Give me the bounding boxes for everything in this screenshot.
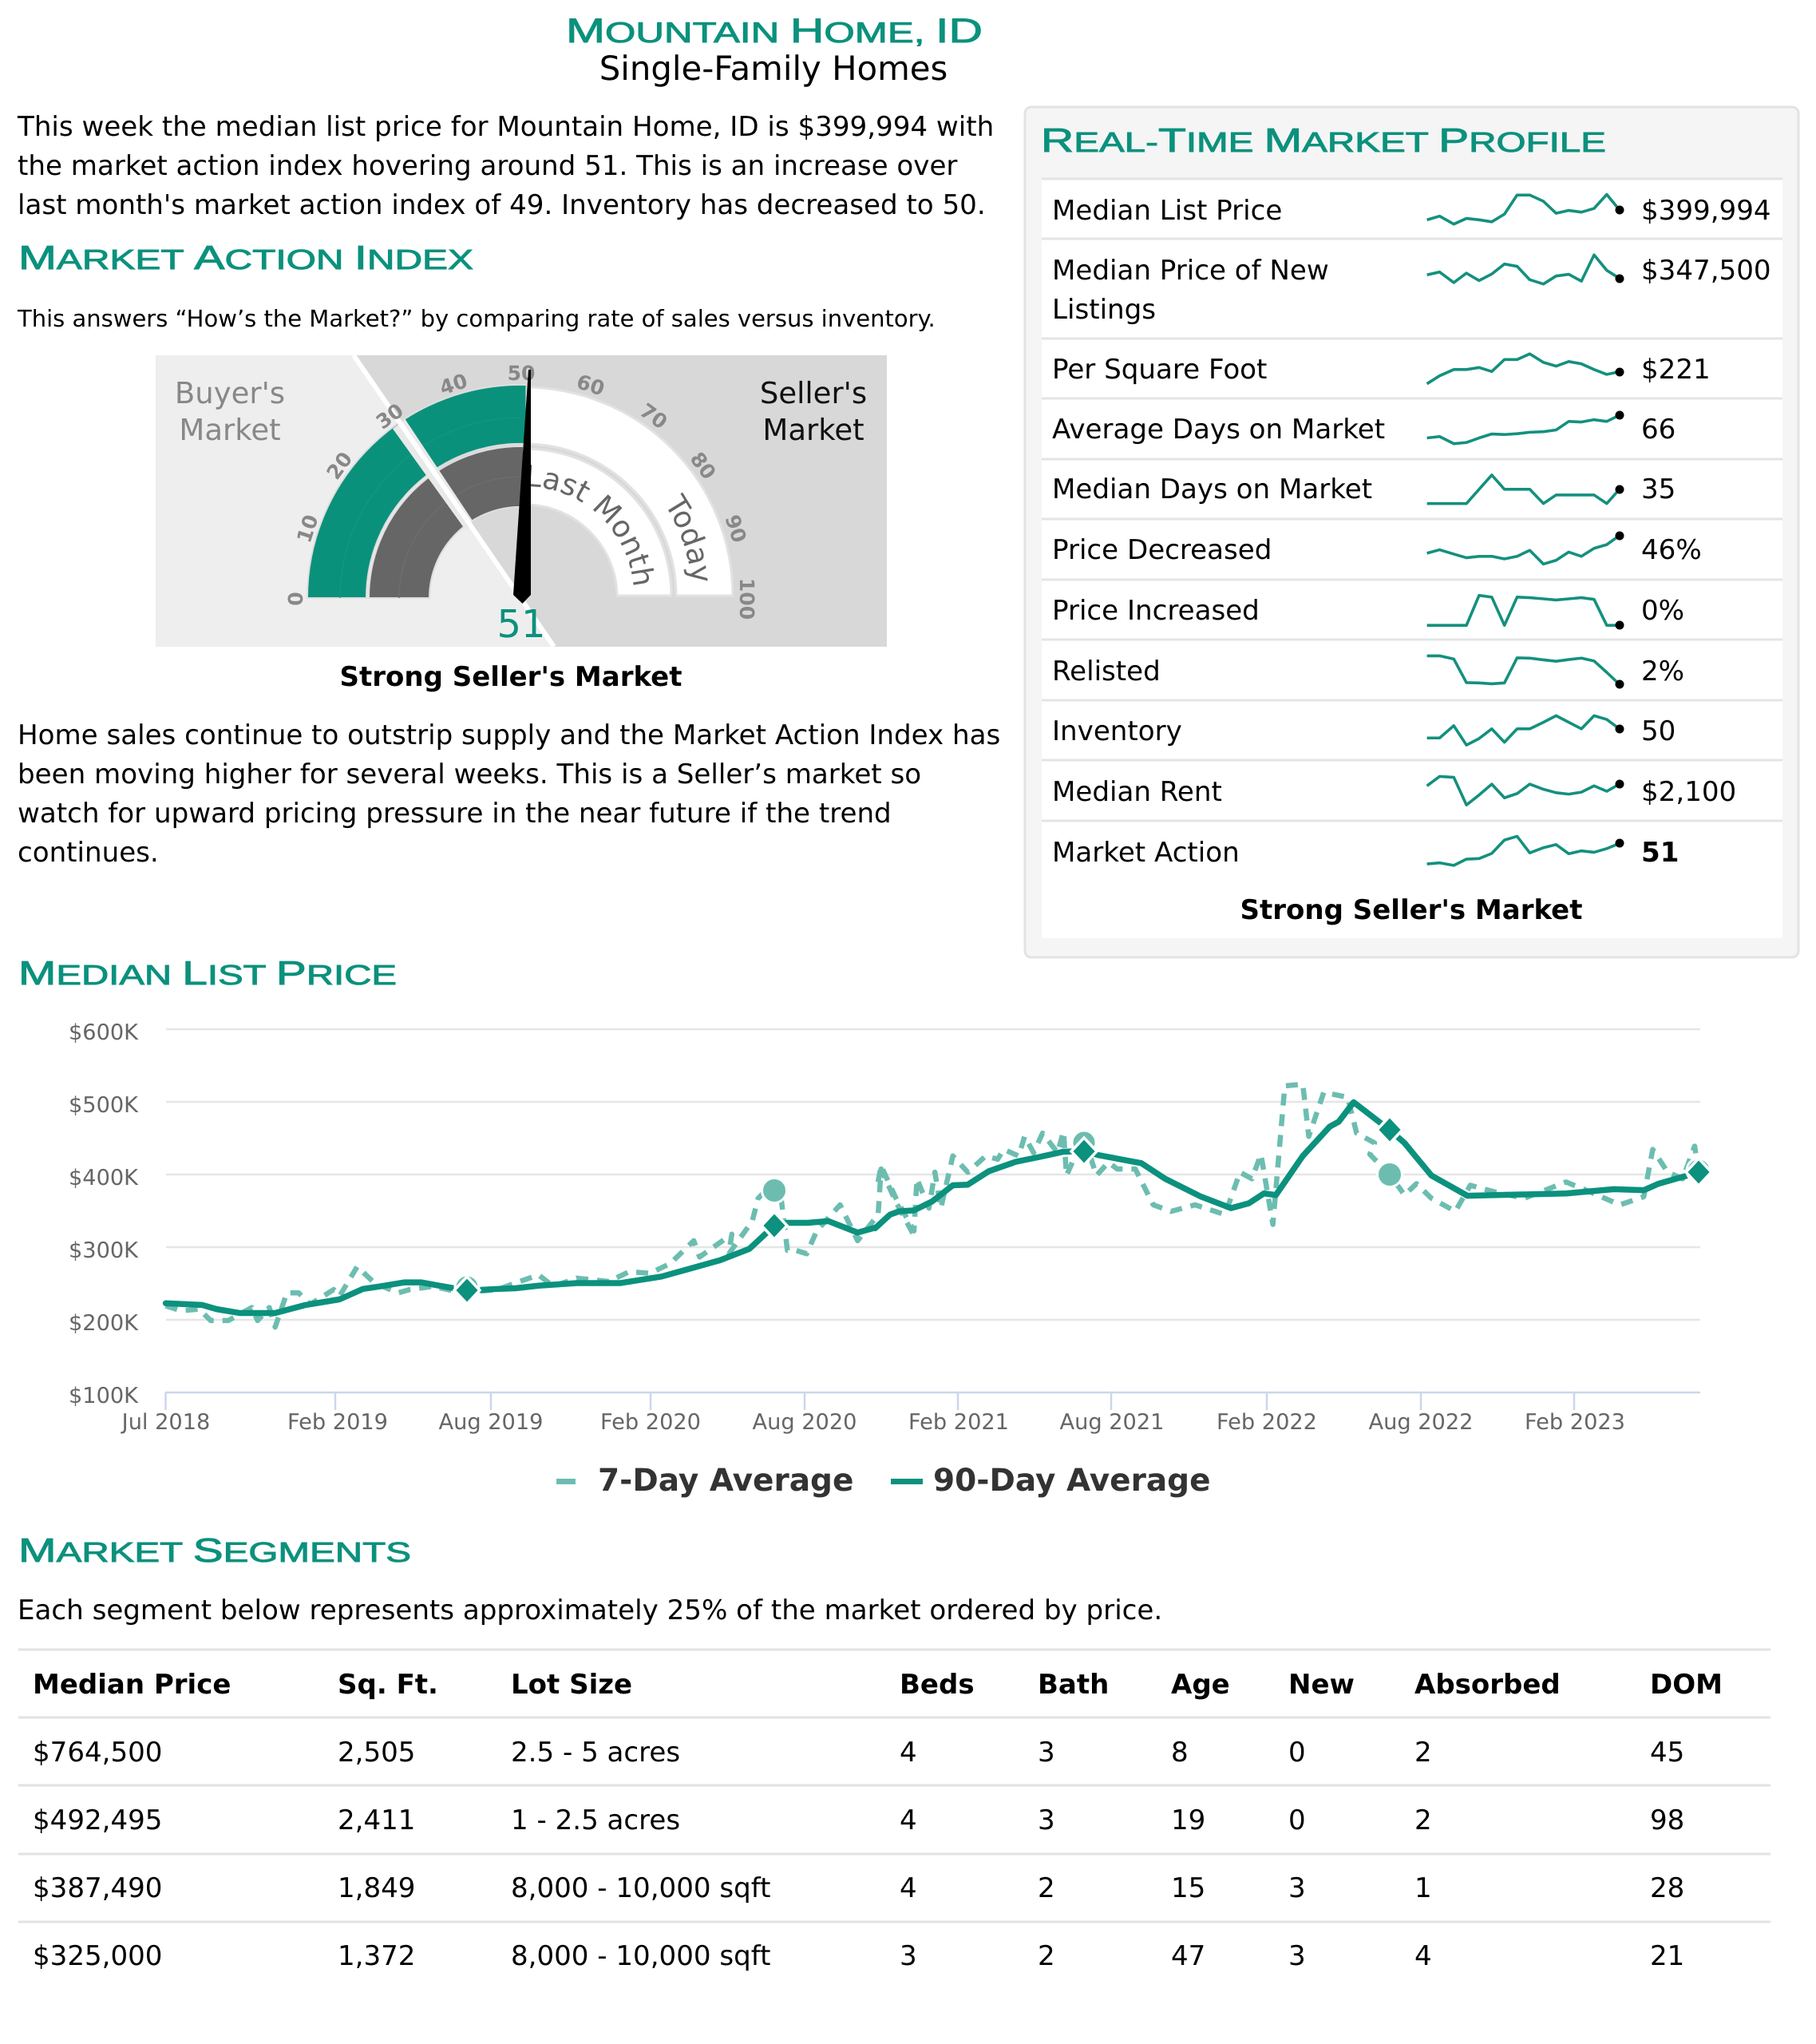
row: market action: [1052, 836, 1679, 869]
analysis text block: watch for upward pricing pressure in the near future if the trend: [18, 798, 892, 830]
seller's market label: Market: [762, 413, 864, 447]
last month arc label: Last Month: [531, 465, 655, 585]
table row 2: 3: [1038, 1804, 1055, 1836]
x axis labels: Aug 2019: [439, 1410, 543, 1435]
gauge tick labels: 10: [292, 512, 323, 545]
row: median list price: [1052, 195, 1771, 227]
7-day markers: [455, 1131, 1711, 1299]
x axis labels: Feb 2022: [1217, 1410, 1317, 1435]
gauge tick labels: 20: [322, 448, 357, 484]
row: relisted: Relisted: [1052, 656, 1161, 687]
analysis text block: [18, 719, 1000, 869]
table row 2: 0: [1288, 1804, 1306, 1836]
row: median days on market: [1052, 473, 1676, 505]
analysis text block: been moving higher for several weeks. This is a Seller’s market so: [18, 759, 921, 790]
chart legend: 90-Day Average: [933, 1463, 1211, 1499]
table header: Bath: [1038, 1669, 1109, 1701]
heading: market segments: M ARKET S EGMENTS: [18, 1531, 411, 1569]
table row 4: 47: [1171, 1940, 1205, 1972]
table row 4: 1,372: [338, 1940, 415, 1972]
right gauge arc: last month track: [527, 449, 671, 596]
table row 4: 3: [1288, 1940, 1306, 1972]
row: market action: Market Action: [1052, 837, 1240, 869]
analysis text block: Home sales continue to outstrip supply and the Market Action Index has: [18, 719, 1000, 751]
90-day markers: [454, 1116, 1711, 1304]
today arc label: Today: [668, 492, 708, 581]
gauge needle: [513, 370, 531, 604]
row: median rent: [1052, 776, 1736, 808]
row: median price of new listings: Median Price of New: [1052, 255, 1329, 287]
gauge tick labels: 70: [635, 398, 671, 434]
table header: Age: [1171, 1669, 1230, 1701]
table row 1: 45: [1650, 1737, 1684, 1769]
x axis labels: Aug 2021: [1060, 1410, 1164, 1435]
y axis labels: [69, 1020, 139, 1408]
x axis labels: Feb 2019: [287, 1410, 388, 1435]
row: price increased: [1052, 595, 1684, 629]
table row 2: 2: [1414, 1804, 1432, 1836]
chart legend: 7-Day Average: [598, 1463, 853, 1499]
table row 2: 19: [1171, 1804, 1205, 1836]
gauge tick labels: 40: [437, 369, 470, 400]
table row 2: [33, 1804, 1684, 1836]
table row 3: 2: [1038, 1872, 1055, 1904]
heading: market action index: M ARKET A CTION INDEX: [18, 239, 473, 276]
market segments description: Each segment below represents approximately 25% of the market ordered by price.: [18, 1594, 1162, 1626]
table header: Median Price: [33, 1669, 231, 1701]
table header: Lot Size: [511, 1669, 632, 1701]
table row 3: 8,000 - 10,000 sqft: [511, 1872, 770, 1904]
y axis labels: $500K: [69, 1093, 139, 1118]
gauge value: 51: [497, 602, 546, 647]
left gauge arc: last month value: [369, 446, 524, 598]
row: average days on market: 66: [1641, 414, 1676, 446]
subtitle: Single-Family Homes: [599, 49, 948, 88]
title: M OUNTAIN H OME, ID: [566, 12, 983, 50]
table header: Beds: [900, 1669, 975, 1701]
row: median price of new listings: $347,500: [1641, 255, 1771, 287]
row: price decreased: [1052, 532, 1702, 566]
gauge tick labels: 30: [372, 398, 408, 434]
table row 1: 3: [1038, 1737, 1055, 1769]
table header: Absorbed: [1414, 1669, 1561, 1701]
row: market action: 51: [1641, 837, 1679, 869]
row: median list price: $399,994: [1641, 195, 1771, 227]
gauge tick labels: 0: [284, 592, 307, 606]
row: median rent: Median Rent: [1052, 776, 1222, 808]
row: relisted: [1052, 656, 1684, 688]
gauge tick labels: 60: [574, 370, 607, 401]
panel verdict: Strong Seller's Market: [1240, 894, 1582, 926]
table row 1: 2: [1414, 1737, 1432, 1769]
x axis labels: Aug 2020: [753, 1410, 857, 1435]
x axis labels: Feb 2023: [1525, 1410, 1625, 1435]
table row 3: 15: [1171, 1872, 1205, 1904]
line chart: median list price: [69, 1020, 1711, 1499]
gauge tick labels: 90: [720, 512, 751, 545]
gauge tick labels: [284, 362, 758, 620]
row: inventory: [1052, 715, 1676, 747]
row: price decreased: Price Decreased: [1052, 534, 1272, 566]
panel heading: R EAL- T IME M ARKET P ROFILE: [1041, 121, 1606, 159]
table header: Sq. Ft.: [338, 1669, 438, 1701]
row: price increased: Price Increased: [1052, 595, 1260, 627]
intro text block: This week the median list price for Mountain Home, ID is $399,994 with: [17, 111, 994, 143]
row: median days on market: Median Days on Market: [1052, 473, 1372, 505]
intro text block: last month's market action index of 49. Inventory has decreased to 50.: [18, 189, 986, 221]
table row 2: $492,495: [33, 1804, 162, 1836]
table header: New: [1288, 1669, 1355, 1701]
table row 4: 8,000 - 10,000 sqft: [511, 1940, 770, 1972]
table row 1: 2,505: [338, 1737, 415, 1769]
table row 4: [33, 1940, 1684, 1972]
x axis labels: Feb 2021: [908, 1410, 1009, 1435]
row: price increased: 0%: [1641, 595, 1684, 627]
table row 1: 8: [1171, 1737, 1189, 1769]
row: median price of new listings: Listings: [1052, 294, 1156, 326]
intro text block: [17, 111, 994, 221]
gauge verdict: Strong Seller's Market: [340, 661, 682, 693]
table row 4: 4: [1414, 1940, 1432, 1972]
y axis labels: $400K: [69, 1166, 139, 1190]
y axis labels: $600K: [69, 1020, 139, 1045]
table row 3: 4: [900, 1872, 917, 1904]
market action gauge: [156, 355, 887, 647]
row: relisted: 2%: [1641, 656, 1684, 687]
table header: DOM: [1650, 1669, 1723, 1701]
x axis labels: [121, 1410, 1625, 1435]
row: average days on market: [1052, 410, 1676, 446]
row: per square foot: [1052, 354, 1711, 386]
gauge tick labels: 80: [686, 448, 721, 484]
table row 4: $325,000: [33, 1940, 162, 1972]
seller's market label: [760, 376, 867, 447]
chart legend: [556, 1463, 1211, 1499]
row: median list price: Median List Price: [1052, 195, 1282, 227]
intro text block: the market action index hovering around 51. This is an increase over: [18, 150, 958, 182]
table row 1: [33, 1737, 1684, 1769]
row: inventory: Inventory: [1052, 715, 1182, 747]
right gauge arc: today track: [527, 387, 733, 596]
y axis labels: $200K: [69, 1311, 139, 1336]
table row 3: 3: [1288, 1872, 1306, 1904]
row: median price of new listings: [1052, 255, 1771, 326]
seller's market label: Seller's: [760, 376, 867, 410]
buyer's market label: [175, 376, 285, 447]
table row 3: [33, 1872, 1684, 1904]
table row 3: 28: [1650, 1872, 1684, 1904]
y axis labels: $300K: [69, 1238, 139, 1263]
gauge tick labels: 100: [735, 578, 758, 620]
x axis labels: Aug 2022: [1369, 1410, 1473, 1435]
market action description: This answers “How’s the Market?” by comparing rate of sales versus inventory.: [17, 305, 936, 332]
table row 3: 1: [1414, 1872, 1432, 1904]
table row 4: 3: [900, 1940, 917, 1972]
left gauge arc: today value: [307, 385, 527, 598]
table row 2: 1 - 2.5 acres: [511, 1804, 680, 1836]
table row 1: 4: [900, 1737, 917, 1769]
row: average days on market: Average Days on Market: [1052, 414, 1385, 446]
table row 2: 4: [900, 1804, 917, 1836]
table row 2: 2,411: [338, 1804, 415, 1836]
table header: [33, 1669, 1723, 1701]
table row 1: 0: [1288, 1737, 1306, 1769]
90-day average line: [166, 1102, 1699, 1313]
table row 3: $387,490: [33, 1872, 162, 1904]
x axis labels: Feb 2020: [600, 1410, 701, 1435]
row: median rent: $2,100: [1641, 776, 1736, 808]
table row 1: $764,500: [33, 1737, 162, 1769]
table row 1: 2.5 - 5 acres: [511, 1737, 680, 1769]
7-day average line: [166, 1084, 1699, 1327]
table row 2: 98: [1650, 1804, 1684, 1836]
panel: real-time market profile: [1025, 107, 1798, 957]
table row 4: 2: [1038, 1940, 1055, 1972]
table: market segments: [18, 1650, 1771, 1972]
row: price decreased: 46%: [1641, 534, 1702, 566]
row: per square foot: $221: [1641, 354, 1711, 386]
buyer's market label: Buyer's: [175, 376, 285, 410]
analysis text block: continues.: [18, 837, 159, 869]
table row 3: 1,849: [338, 1872, 415, 1904]
row: per square foot: Per Square Foot: [1052, 354, 1267, 386]
row: median days on market: 35: [1641, 473, 1676, 505]
y axis labels: $100K: [69, 1384, 139, 1408]
row: inventory: 50: [1641, 715, 1676, 747]
x axis labels: Jul 2018: [121, 1410, 210, 1435]
gauge tick labels: 50: [508, 362, 535, 385]
table row 4: 21: [1650, 1940, 1684, 1972]
heading: median list price: M EDIAN LIST P RICE: [18, 954, 397, 992]
buyer's market label: Market: [179, 413, 281, 447]
